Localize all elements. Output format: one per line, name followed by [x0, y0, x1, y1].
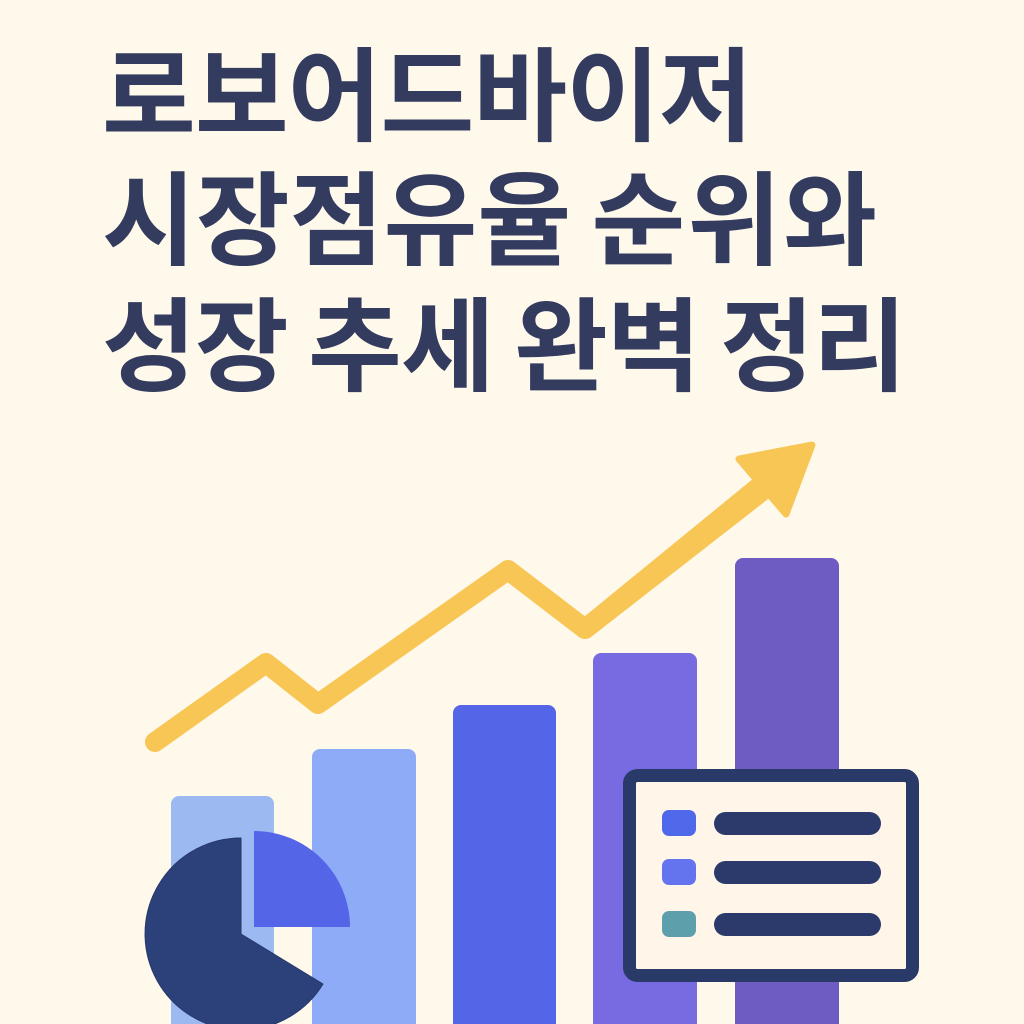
bar 2	[312, 749, 416, 1024]
legend card	[630, 776, 912, 976]
title	[102, 41, 906, 405]
bar 3	[453, 705, 556, 1024]
trend arrow	[155, 445, 812, 742]
bar 5	[735, 558, 839, 1024]
legend row 1	[662, 810, 881, 836]
pie chart	[145, 831, 350, 1024]
title: 성장 추세 완벽 정리	[102, 291, 906, 405]
bar 4	[593, 653, 697, 1024]
bar 1	[171, 796, 274, 1024]
title: 로보어드바이저	[102, 41, 752, 155]
legend row 3	[662, 911, 881, 937]
title: 시장점유율 순위와	[102, 165, 879, 279]
legend row 2	[662, 859, 881, 885]
